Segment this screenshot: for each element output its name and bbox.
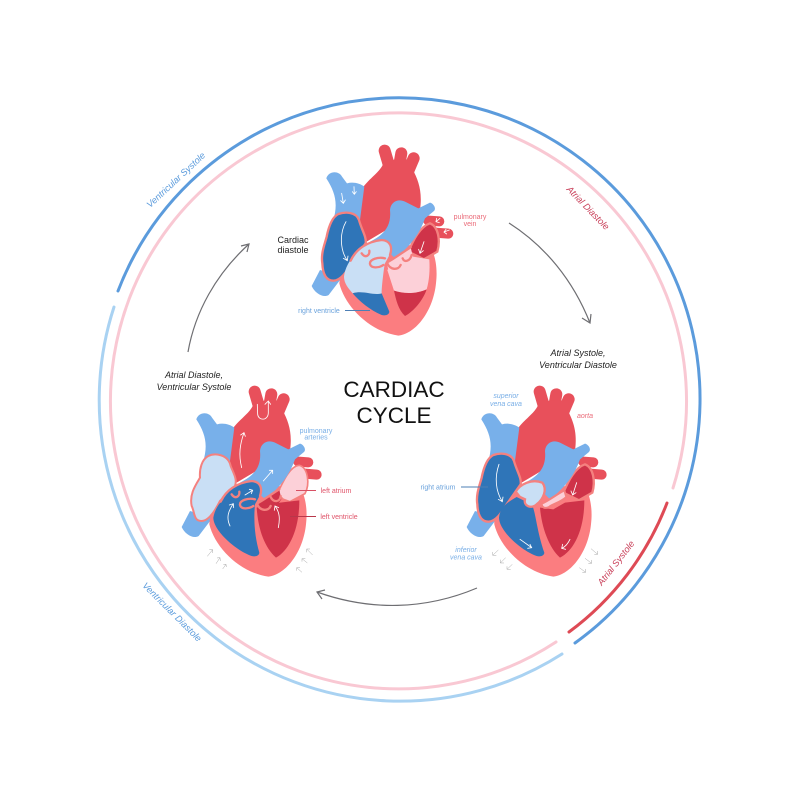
aorta	[511, 392, 576, 483]
left ventricle dark	[394, 289, 427, 316]
mitral valve	[257, 489, 281, 511]
label: pulmonary vein: vein	[464, 221, 477, 228]
label: right ventricle: right ventricle	[298, 308, 340, 315]
ring: ventricular systole arc	[118, 98, 700, 643]
cycle arrow: left to top	[188, 244, 249, 352]
cycle arrow: top to right	[509, 223, 591, 323]
vena cava	[182, 413, 234, 537]
label: pulmonary arteries: pulmonary	[300, 428, 333, 435]
label: pulmonary vein: pulmonary	[454, 214, 487, 221]
title: CYCLE	[356, 403, 432, 428]
label: pulmonary arteries: arteries	[304, 434, 328, 442]
pulmonary veins	[298, 462, 317, 475]
left ventricle light	[387, 255, 430, 293]
left ventricle	[257, 500, 299, 558]
label: superior vena cava	[490, 393, 522, 408]
title: CARDIAC	[343, 377, 445, 402]
label: ventricular diastole: Ventricular Diastole	[140, 580, 204, 644]
flow arrows	[496, 464, 577, 549]
label: right atrium	[420, 484, 488, 492]
left atrium	[563, 464, 594, 500]
right ventricle	[213, 496, 259, 556]
right atrium	[191, 454, 236, 521]
label: atrial diastole ventricular systole	[157, 370, 231, 392]
heart: ventricular systole	[182, 392, 317, 577]
right ventricle light	[344, 252, 385, 294]
left atrium	[277, 465, 308, 502]
ring: ventricular diastole arc	[99, 307, 562, 701]
mitral valve	[542, 490, 566, 508]
heart: cardiac diastole	[312, 151, 449, 336]
label: atrial systole ventricular diastole	[539, 348, 617, 370]
vena cava	[312, 172, 364, 296]
heart: ventricular diastole	[467, 392, 602, 577]
vena cava	[467, 413, 519, 537]
right ventricle dark	[353, 292, 389, 315]
label: left ventricle: left ventricle	[320, 514, 358, 521]
right atrium	[477, 454, 521, 522]
label: right atrium: right atrium	[420, 484, 456, 492]
pulmonary veins	[583, 462, 602, 475]
label: cardiac diastole	[277, 235, 309, 255]
label: left atrium	[296, 488, 352, 495]
tricuspid valve	[351, 240, 391, 267]
title	[343, 377, 445, 428]
label: atrial diastole: Atrial Diastole	[564, 183, 611, 232]
pulmonary artery	[370, 200, 435, 258]
flow arrows	[341, 187, 449, 261]
label: inferior vena cava	[450, 547, 482, 562]
label: pulmonary vein	[454, 214, 487, 228]
label: atrial systole: Atrial Systole	[595, 539, 636, 588]
pressure arrows	[207, 549, 313, 572]
pulmonary artery	[525, 441, 590, 499]
label: cardiac diastole: diastole	[277, 245, 309, 255]
label: pulmonary arteries	[300, 428, 333, 442]
tricuspid valve	[221, 481, 261, 508]
label: superior vena cava: vena cava	[490, 401, 522, 408]
tricuspid valve	[516, 481, 545, 507]
label: ventricular systole: Ventricular Systole	[145, 150, 207, 210]
label: inferior vena cava: vena cava	[450, 554, 482, 562]
aorta	[226, 392, 291, 483]
pulmonary veins	[428, 221, 448, 234]
label: aorta: aorta	[577, 413, 593, 420]
label: cardiac diastole: Cardiac	[277, 235, 309, 245]
label: atrial diastole ventricular systole: Ventricular Systole	[157, 382, 231, 392]
right atrium	[322, 213, 366, 281]
label: atrial systole ventricular diastole: Atrial Systole,	[549, 348, 606, 358]
left atrium	[408, 223, 439, 259]
ring: atrial systole arc	[569, 503, 667, 632]
heart wall	[209, 484, 307, 577]
cycle arrow: right to left	[317, 588, 477, 605]
heart wall	[339, 243, 437, 336]
label: left ventricle	[290, 514, 358, 521]
label: superior vena cava: superior	[493, 393, 519, 400]
ring: atrial diastole arc	[110, 113, 686, 689]
aorta	[356, 151, 421, 242]
flow arrows	[228, 401, 279, 528]
label: atrial systole ventricular diastole: Ventricular Diastole	[539, 360, 617, 370]
right ventricle	[499, 497, 544, 556]
left ventricle	[540, 500, 584, 558]
mitral valve	[387, 247, 413, 270]
label: inferior vena cava: inferior	[455, 547, 477, 554]
label: atrial diastole ventricular systole: Atrial Diastole,	[164, 370, 223, 380]
label: right ventricle	[298, 308, 370, 315]
pulmonary artery	[240, 441, 305, 499]
label: left atrium: left atrium	[321, 488, 352, 495]
heart wall	[494, 484, 592, 577]
pressure arrows	[493, 549, 598, 572]
